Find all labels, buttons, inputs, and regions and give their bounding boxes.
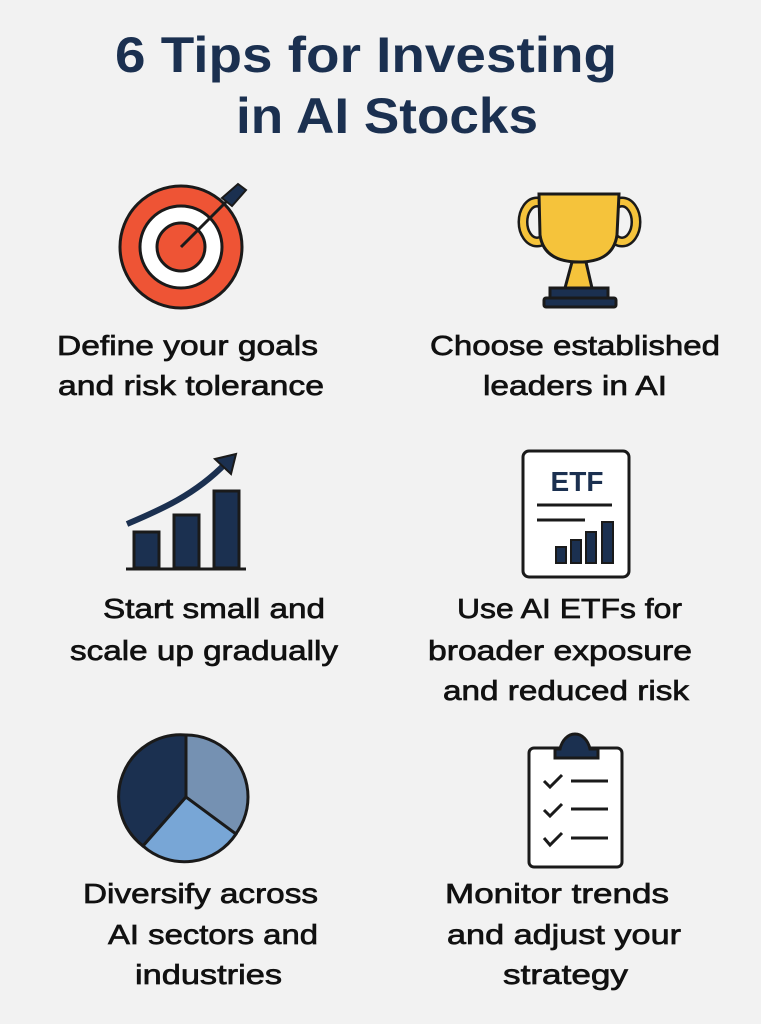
icon: trophy xyxy=(523,194,636,307)
text: tip 4: Use AI ETFs for xyxy=(457,593,682,624)
title xyxy=(115,27,617,144)
icon: clipboard xyxy=(529,734,622,867)
icon: growth chart xyxy=(126,454,246,569)
text: tip 4: and reduced risk xyxy=(443,675,690,706)
text: tip 6: strategy xyxy=(503,959,628,990)
text: tip 1: and risk tolerance xyxy=(58,370,324,401)
text: tip 6 xyxy=(445,878,681,990)
text: tip 5: Diversify across xyxy=(83,878,318,909)
title: in AI Stocks xyxy=(236,88,538,144)
text: tip 5 xyxy=(83,878,318,990)
text: tip 4: broader exposure xyxy=(428,635,692,666)
text: tip 5: AI sectors and xyxy=(108,919,318,950)
title: 6 Tips for Investing xyxy=(115,27,617,83)
text: tip 1 xyxy=(57,330,324,401)
text: tip 3: Start small and xyxy=(103,593,325,624)
text: tip 2: Choose established xyxy=(430,330,720,361)
text: tip 2 xyxy=(430,330,720,401)
text: tip 4 xyxy=(428,593,692,706)
text: tip 3: scale up gradually xyxy=(70,635,338,666)
text: tip 3 xyxy=(70,593,338,666)
icon: pie chart xyxy=(119,735,248,862)
icon: target xyxy=(120,184,246,308)
text: tip 5: industries xyxy=(135,959,282,990)
text: tip 6: Monitor trends xyxy=(445,878,669,909)
icon: ETF document xyxy=(523,451,629,577)
text: tip 2: leaders in AI xyxy=(483,370,667,401)
text: tip 6: and adjust your xyxy=(447,919,681,950)
text: tip 1: Define your goals xyxy=(57,330,318,361)
icon: ETF document: ETF xyxy=(551,466,603,497)
